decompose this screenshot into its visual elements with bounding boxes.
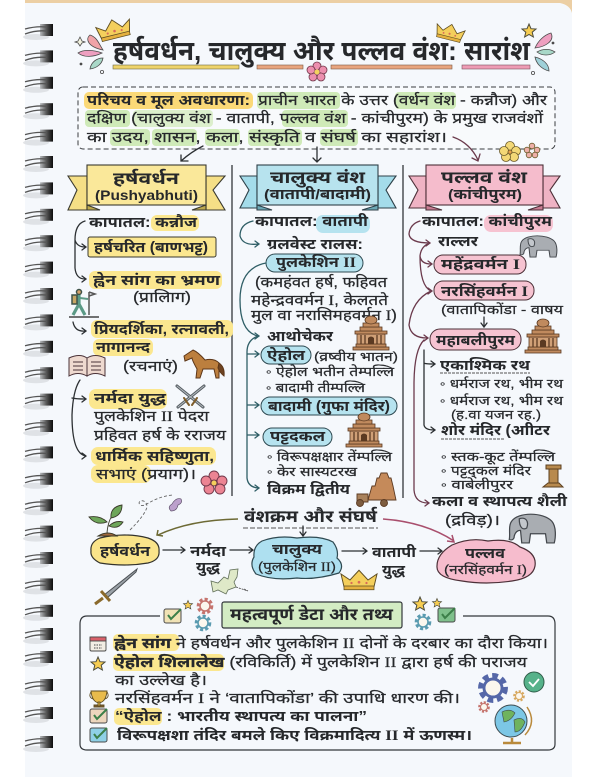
column: chalukya: ◦ विरूपक्षक्षार तेंम्पल्लि xyxy=(267,449,392,464)
icon: butterfly trail xyxy=(130,495,182,530)
column: chalukya: पुलकेशिन II xyxy=(276,253,356,272)
decoration: left petals xyxy=(75,35,104,74)
panel: introduction: प्राचीन भारत के उत्तर (वर्धन वंश - कन्नौज) और xyxy=(258,91,548,109)
icon: header right stars xyxy=(413,597,442,610)
icon: small gears xyxy=(479,691,524,712)
column: chalukya xyxy=(240,213,398,498)
title: हर्षवर्धन, चालुक्य और पल्लव वंश: सारांश xyxy=(113,35,530,67)
panel: key facts: ह्वेन सांग ने हर्षवर्धन और पुलकेशिन II दोनों के दरबार का दौरा किया। xyxy=(114,634,548,653)
icon: trophy xyxy=(90,691,108,707)
icon: globe xyxy=(495,705,532,743)
icon: header left check xyxy=(164,609,181,623)
icon: pink flower xyxy=(201,471,227,494)
panel: key facts: महत्वपूर्ण डेटा और तथ्य xyxy=(230,604,394,626)
panel: key facts: नरसिंहवर्मन I ने ‘वातापिकोंडा’ की उपाधि धारण की। xyxy=(115,689,460,707)
icon: map xyxy=(211,569,238,594)
column: harshavardhana: नर्मदा युद्ध xyxy=(94,390,167,408)
icon: beige checkbox xyxy=(90,709,107,723)
column: harshavardhana xyxy=(72,214,233,483)
column: pallava: महाबलीपुरम xyxy=(436,332,516,350)
banner: chalukya xyxy=(240,165,396,210)
icon: star xyxy=(522,24,536,37)
panel: introduction: का उदय, शासन, कला, संस्कृति व संघर्ष का सहारांश। xyxy=(87,129,447,147)
column: pallava: नरसिंहवर्मन I xyxy=(441,283,528,300)
column: chalukya: ऐहोल xyxy=(267,346,305,364)
cloud: harsha: हर्षवर्धन xyxy=(100,543,151,560)
divider: left xyxy=(231,165,233,496)
section: dynasty flow: युद्ध xyxy=(196,560,221,577)
icon: elephant top xyxy=(520,236,557,257)
icon: pillar xyxy=(543,465,563,487)
column: chalukya: ग्रलवेस्ट रालस: xyxy=(267,235,363,253)
column: pallava: शोर मंदिर (आीटर xyxy=(441,422,551,439)
arrow: intro to chalukya xyxy=(313,147,321,162)
icon: header left gears xyxy=(196,600,212,630)
icon: temple pattadakal xyxy=(346,413,382,447)
icon: green badge xyxy=(524,672,544,692)
column: pallava: (वातापिकोंडा - वाषय xyxy=(441,302,564,317)
panel: introduction xyxy=(78,87,555,149)
icon: traveller xyxy=(69,290,99,317)
column: chalukya: (कमहंवत हर्ष, फहिवत xyxy=(255,274,388,291)
icon: large gear xyxy=(481,676,505,700)
icon: sword xyxy=(95,569,137,604)
section: dynasty flow xyxy=(91,506,535,583)
banner: pallava xyxy=(409,165,560,210)
column: harshavardhana: कापातल: कन्नौज xyxy=(89,214,198,231)
cloud: harsha xyxy=(91,535,159,565)
icon: crossed swords xyxy=(177,386,204,407)
icon: header right gear xyxy=(416,616,430,628)
column: harshavardhana: सभाएं (प्रयाग)। xyxy=(96,466,196,483)
icon: open book xyxy=(69,356,105,376)
column: chalukya: बादामी (गुफा मंदिर) xyxy=(268,398,390,416)
cloud: chalukya: चालुक्य xyxy=(272,542,323,559)
cloud: pallava xyxy=(437,540,535,583)
cloud: chalukya: (पुलकेशिन II) xyxy=(258,559,336,575)
icon: right crown xyxy=(434,21,466,43)
column: pallava: महेंद्रवर्मन I xyxy=(441,256,520,273)
decoration: right petals xyxy=(531,33,555,75)
column: chalukya: कापातल: वातापी xyxy=(255,213,369,230)
icon: elephant bottom xyxy=(509,514,555,543)
banner: chalukya: (वातापी/बादामी) xyxy=(264,186,371,202)
column: chalukya: आथोचेकर xyxy=(267,327,334,345)
banner: pallava: (कांचीपुरम) xyxy=(448,186,522,204)
column: chalukya: ◦ ऐहोल भतीन तेम्पल्लि xyxy=(266,364,394,379)
column: pallava: एकाश्मिक रथ xyxy=(440,357,531,374)
cloud: chalukya xyxy=(252,537,342,579)
icon: header right check xyxy=(438,608,455,622)
arrow: intro to harsha xyxy=(181,146,203,161)
column: harshavardhana: (रचनाएं) xyxy=(123,358,178,375)
arrow: intro to pallava xyxy=(453,137,480,161)
column: chalukya: ◦ बादामी तीम्पल्लि xyxy=(266,380,365,395)
icon: horse xyxy=(184,350,224,378)
column: pallava: ◦ धर्मराज रथ, भीम रथ xyxy=(440,376,564,391)
column: pallava xyxy=(409,213,568,529)
section: dynasty flow: नर्मदा xyxy=(190,543,227,560)
column: pallava: ◦ धर्मराज रथ, भीम रथ xyxy=(440,393,564,408)
column: pallava: कला व स्थापत्य शैली xyxy=(432,492,568,510)
section: dynasty flow: वंशक्रम और संघर्ष xyxy=(244,506,378,526)
column: chalukya: ◦ केर सास्यटरख xyxy=(267,464,357,479)
column: pallava: ◦ वाबेलीपुरर xyxy=(441,477,514,493)
icon: calendar xyxy=(90,637,106,651)
icon: temple mahabalipuram xyxy=(525,319,561,353)
spiral binding xyxy=(23,24,53,752)
banner: harshavardhana: हर्षवर्धन xyxy=(113,168,180,188)
icon: flow crown xyxy=(341,570,377,590)
icon: sprout xyxy=(89,505,123,536)
column: chalukya: पट्टदकल xyxy=(270,429,325,445)
column: harshavardhana: पुलकेशिन II पेदरा xyxy=(94,407,209,426)
panel: key facts: “ऐहोल : भारतीय स्थापत्य का पालना” xyxy=(115,707,367,725)
column: pallava: (ह.वा यजन रह.) xyxy=(451,407,541,422)
icon: small flowers xyxy=(500,142,540,162)
column: pallava: ◦ स्तक-कूट तेंम्पल्लि xyxy=(441,449,555,465)
banner: chalukya: चालुक्य वंश xyxy=(270,168,366,188)
column: chalukya: (व्रष्वीय भातन) xyxy=(314,349,398,364)
icon: temple chariot xyxy=(356,473,396,506)
column: pallava: राल्लर xyxy=(438,234,479,250)
cloud: pallava: (नरसिंहवर्मन I) xyxy=(444,562,527,577)
icon: fact star xyxy=(91,657,105,670)
column: chalukya: मुल वा नरासिमहवर्मन I) xyxy=(251,307,397,325)
banner: pallava: पल्लव वंश xyxy=(441,168,528,187)
icon: temple aihole xyxy=(353,316,389,350)
column: harshavardhana: (प्रालिाग) xyxy=(133,289,191,306)
arrow: map route xyxy=(236,587,248,591)
column: harshavardhana: ह्वेन सांग का भ्रमण xyxy=(93,271,220,289)
icon: title flower xyxy=(307,62,327,81)
column: harshavardhana: धार्मिक सहिष्णुता, xyxy=(95,448,214,466)
column: chalukya: विक्रम द्वितीय xyxy=(267,481,351,498)
column: harshavardhana: नागानन्द xyxy=(96,340,151,356)
icon: blue checkbox xyxy=(90,728,107,742)
section: dynasty flow: युद्ध xyxy=(382,563,405,580)
panel: key facts: विरूपक्षशा तंदिर बमले किए विक्रमादित्य II में ऊणस्म। xyxy=(117,726,472,744)
column: chalukya: महेन्द्रववर्मन I, केलतते xyxy=(251,291,389,309)
column: harshavardhana: प्रियदर्शिका, रत्नावली, xyxy=(94,321,229,338)
column: pallava: (द्रविड़)। xyxy=(445,512,500,529)
column: harshavardhana: प्रहिवत हर्ष के रराजय xyxy=(94,426,227,444)
panel: introduction: परिचय व मूल अवधारणा: xyxy=(87,92,250,110)
panel: key facts: का उल्लेख है। xyxy=(115,671,207,689)
panel: key facts xyxy=(80,602,555,750)
icon: left crown xyxy=(95,16,133,42)
banner: harshavardhana: (Pushyabhuti) xyxy=(95,187,198,203)
column: pallava: ◦ पट्टद्कल मंदिर xyxy=(441,463,532,479)
banner: harshavardhana xyxy=(68,165,225,210)
column: harshavardhana: हर्षचरित (बाणभट्ट) xyxy=(94,239,208,256)
panel: introduction: दक्षिण (चालुक्य वंश - वातापी, पल्लव वंश - कांचीपुरम) के प्रमुख राजवंशों xyxy=(87,109,543,128)
section: dynasty flow: वातापी xyxy=(372,544,417,561)
cloud: pallava: पल्लव xyxy=(465,546,505,562)
column: pallava: कापातल: कांचीपुरम xyxy=(422,213,553,231)
icon: header left star xyxy=(183,600,193,609)
panel: key facts: ऐहोल शिलालेख (रविकिर्ति) में पुलकेशिन II द्वारा हर्ष की पराजय xyxy=(114,653,528,672)
divider: right xyxy=(402,165,404,498)
